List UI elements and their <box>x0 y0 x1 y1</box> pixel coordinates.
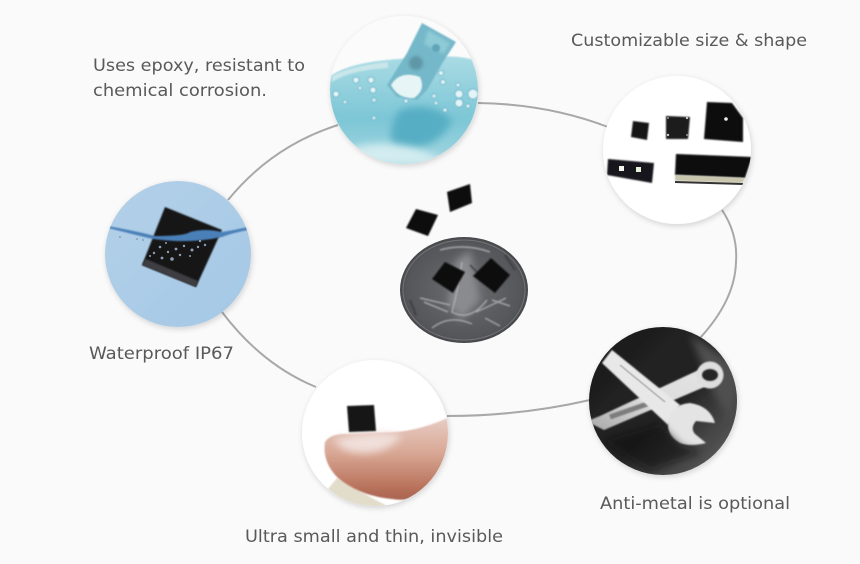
loose chip top <box>447 184 472 212</box>
gel column <box>387 23 456 100</box>
photo: chip on fingertip <box>302 360 460 510</box>
gel pool <box>328 57 482 170</box>
label: customizable: Customizable size & shape <box>571 31 807 50</box>
large cut corner tag <box>704 102 743 142</box>
label: waterproof: Waterproof IP67 <box>89 344 234 363</box>
center: coin with chips <box>400 184 528 343</box>
photo: crossed wrenches <box>589 327 745 475</box>
open wrench <box>602 350 680 425</box>
chip on coin left <box>432 262 465 293</box>
fingernail highlight <box>333 433 402 453</box>
coin <box>400 237 528 343</box>
photo: custom shapes <box>603 76 752 224</box>
medium square tag <box>666 116 690 139</box>
long flat tag <box>675 154 752 178</box>
bubbles <box>333 70 478 120</box>
label: anti-metal: Anti-metal is optional <box>600 494 790 513</box>
ring wrench <box>592 370 706 431</box>
wrench shadow <box>603 424 702 470</box>
label: chemical resistance: chemical corrosion. <box>93 81 267 100</box>
black chip <box>142 207 222 287</box>
bubbles <box>119 236 206 261</box>
water line <box>108 226 248 241</box>
loose chip left <box>406 209 438 236</box>
infographic <box>90 16 806 544</box>
under finger <box>328 478 386 506</box>
label: chemical resistance <box>93 56 305 100</box>
grey reflection <box>690 336 737 412</box>
label: chemical resistance: Uses epoxy, resistant to <box>93 56 305 75</box>
photo: epoxy gel <box>328 16 482 170</box>
photo: waterproof chip <box>105 181 251 327</box>
finger <box>324 418 448 501</box>
bar tag with windows <box>607 159 654 183</box>
connecting ring <box>222 103 736 416</box>
small square tag <box>631 121 649 140</box>
tiny black chip <box>347 405 376 432</box>
label: ultra small: Ultra small and thin, invisible <box>245 527 503 546</box>
chip on coin right <box>473 258 510 293</box>
